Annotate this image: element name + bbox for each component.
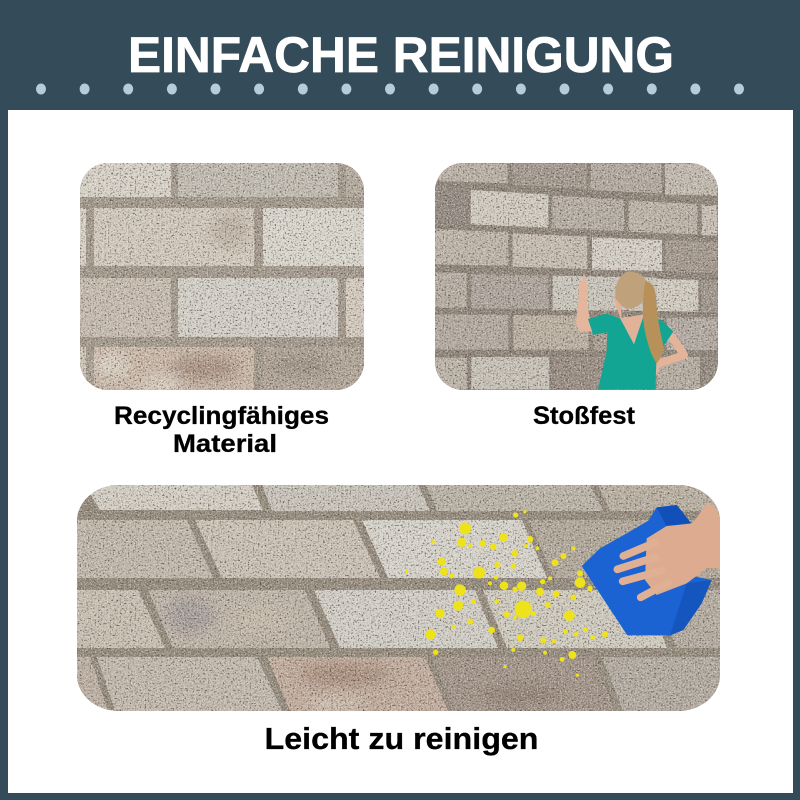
dotted divider row	[36, 84, 744, 94]
blue cloth	[582, 505, 712, 635]
brick courses	[435, 163, 717, 389]
yellow paint splatter	[405, 510, 608, 677]
caption: Stoßfest: Stoßfest	[533, 402, 636, 430]
caption: Leicht zu reinigen: Leicht zu reinigen	[264, 721, 538, 756]
panel: brick wall close-up	[80, 163, 364, 393]
girl figure	[576, 271, 684, 389]
slanted bricks	[77, 485, 720, 711]
panel: cleaning brick wall	[77, 485, 722, 711]
caption: Recyclingfähiges Material	[114, 402, 329, 458]
panel: girl touching brick wall	[435, 163, 718, 390]
caption: Recyclingfähiges Material: Recyclingfähiges	[114, 402, 329, 430]
hand wiping wall	[617, 503, 722, 597]
caption: Recyclingfähiges Material: Material	[173, 430, 277, 458]
title: EINFACHE REINIGUNG	[128, 27, 674, 83]
